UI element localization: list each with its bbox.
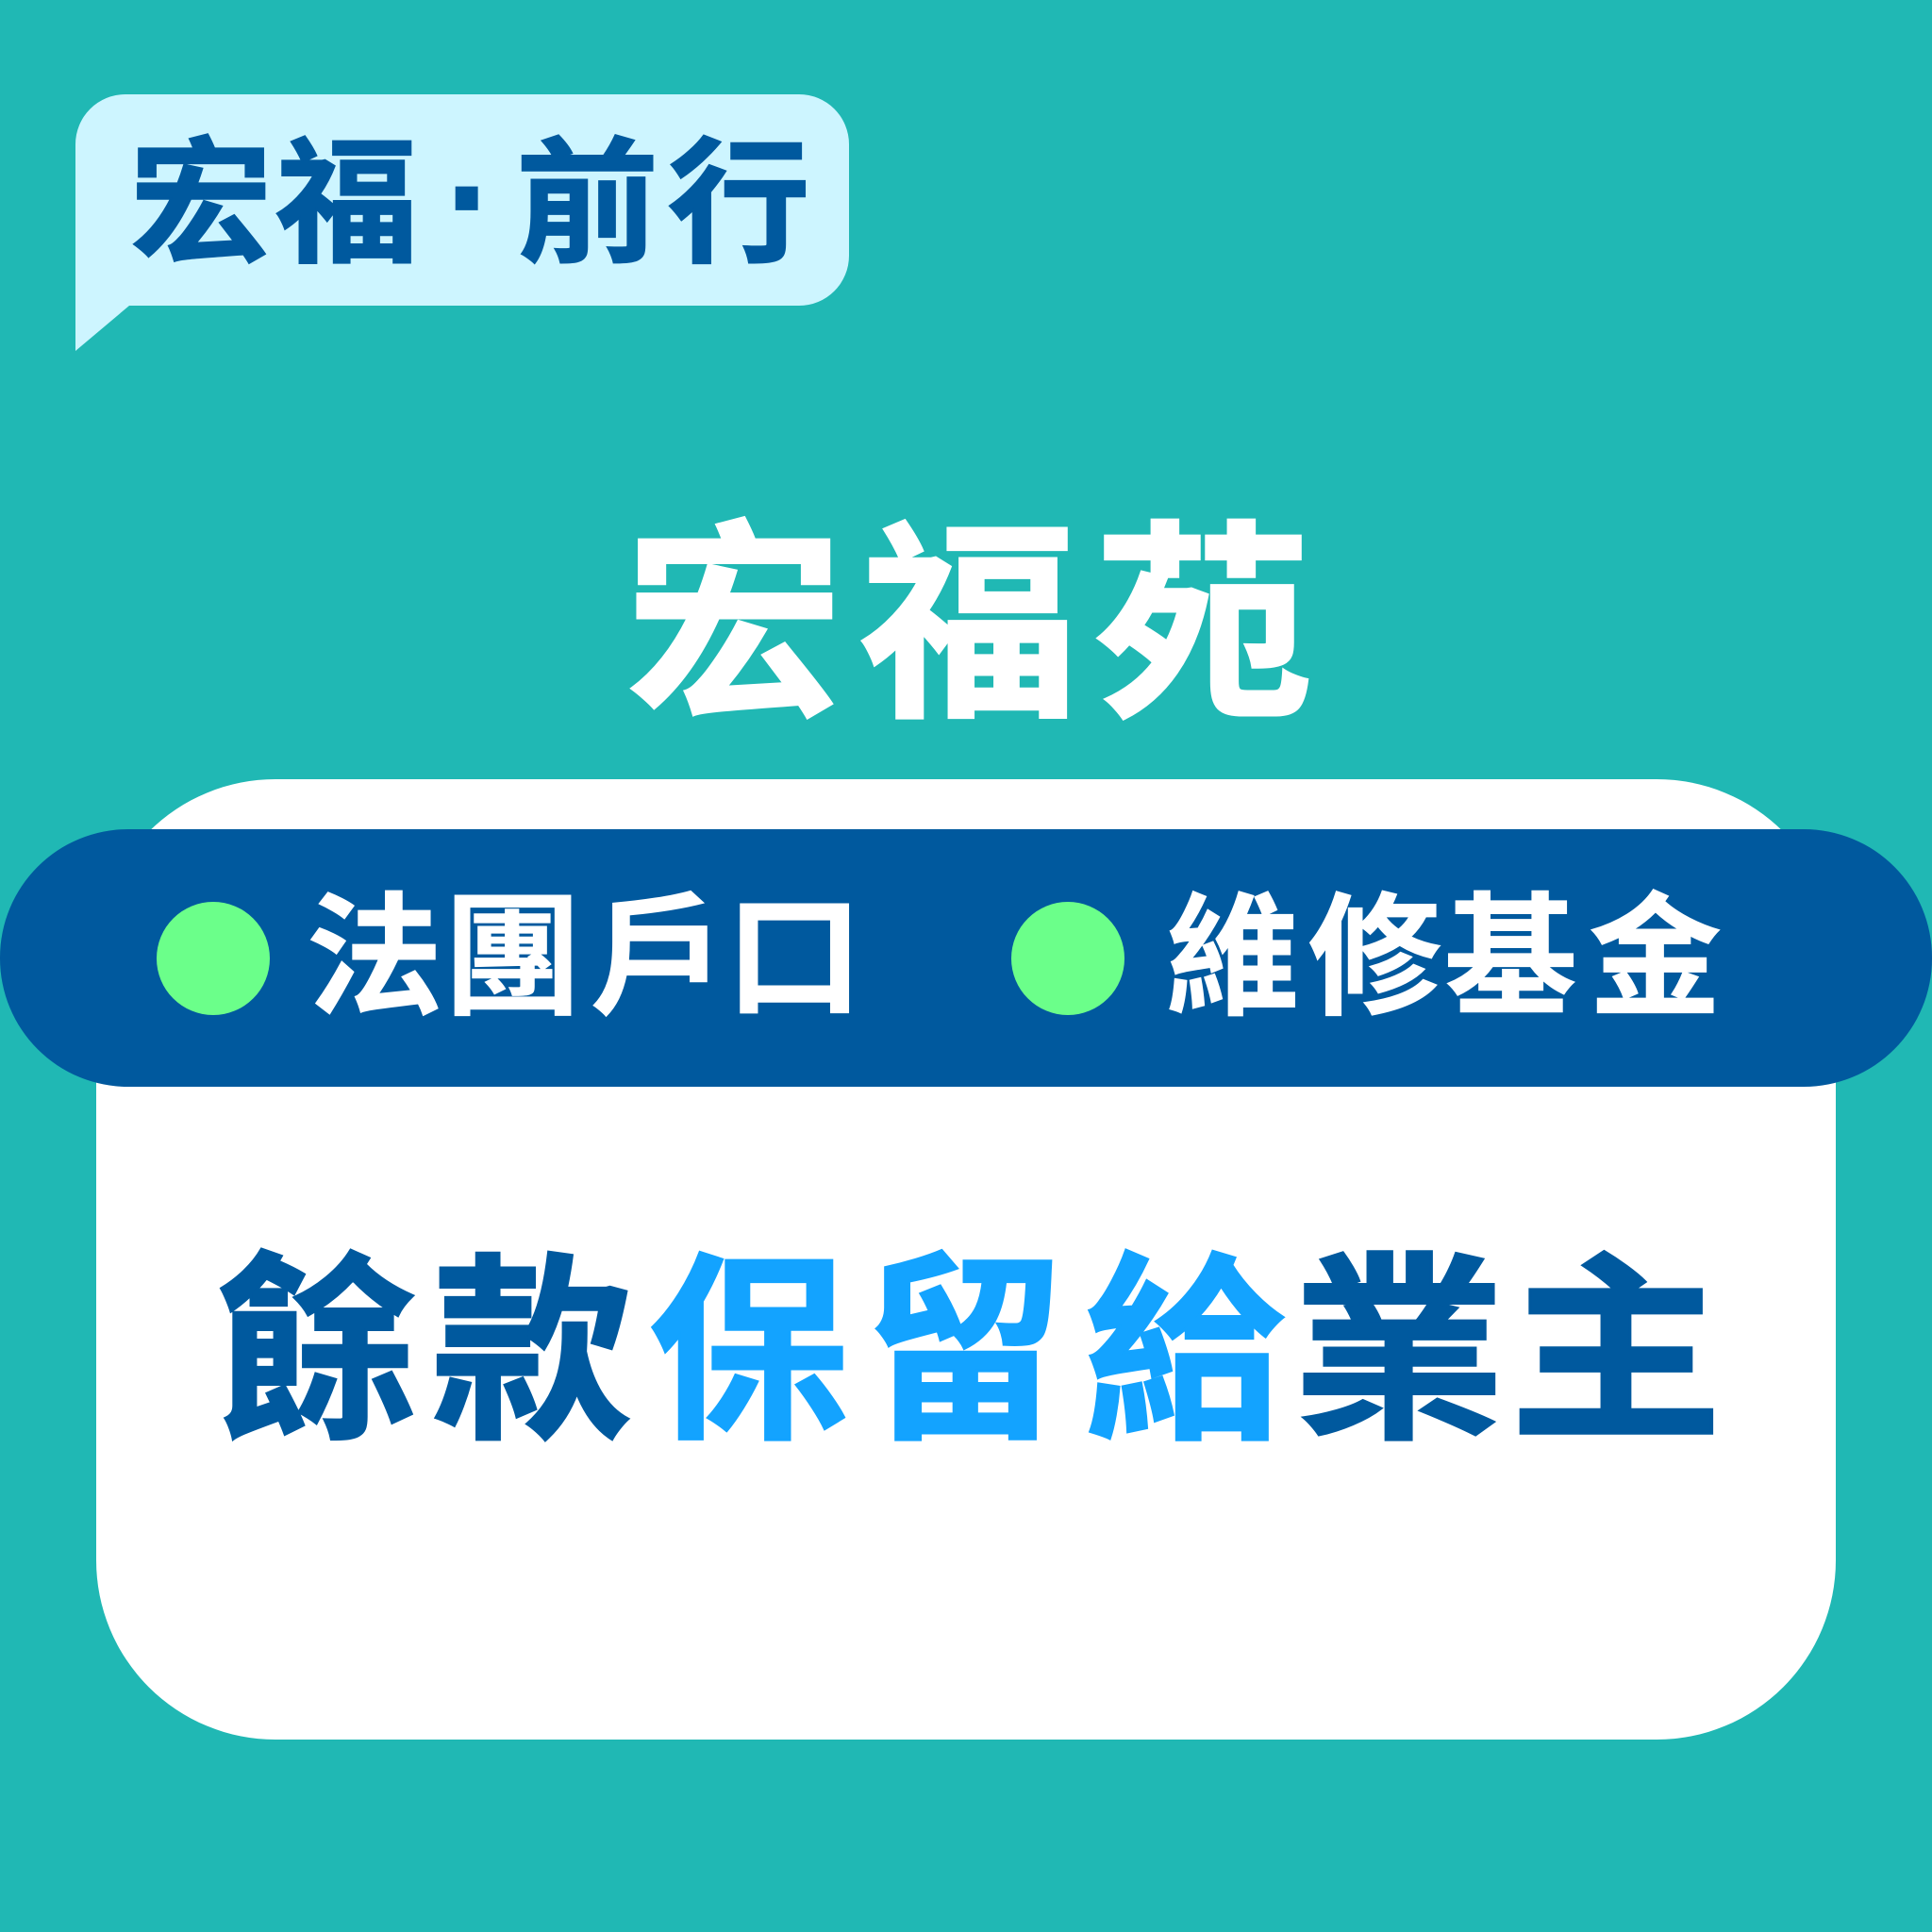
header title: Wang Fuk: 宏福	[130, 128, 418, 280]
bubble shape	[75, 94, 849, 351]
panel: white card	[96, 779, 1836, 1740]
main message	[217, 1241, 1722, 1465]
header title: moving forward: 前行	[516, 128, 810, 280]
label: owners corporation account: 法團戶口	[306, 884, 863, 1033]
speech bubble header	[75, 94, 849, 351]
icon: green dot left	[157, 902, 270, 1015]
header separator dot: ·	[444, 108, 498, 287]
estate name heading: 宏福苑	[625, 508, 1312, 744]
icon: green dot right	[1011, 902, 1124, 1015]
pill background	[0, 829, 1932, 1087]
message part: reserved for (highlight): 保留給	[649, 1241, 1285, 1464]
label: maintenance fund: 維修基金	[1166, 883, 1722, 1032]
panel: blue pill banner	[0, 829, 1932, 1087]
message part: owners: 業主	[1293, 1241, 1722, 1465]
message part: remaining funds: 餘款	[217, 1241, 632, 1464]
